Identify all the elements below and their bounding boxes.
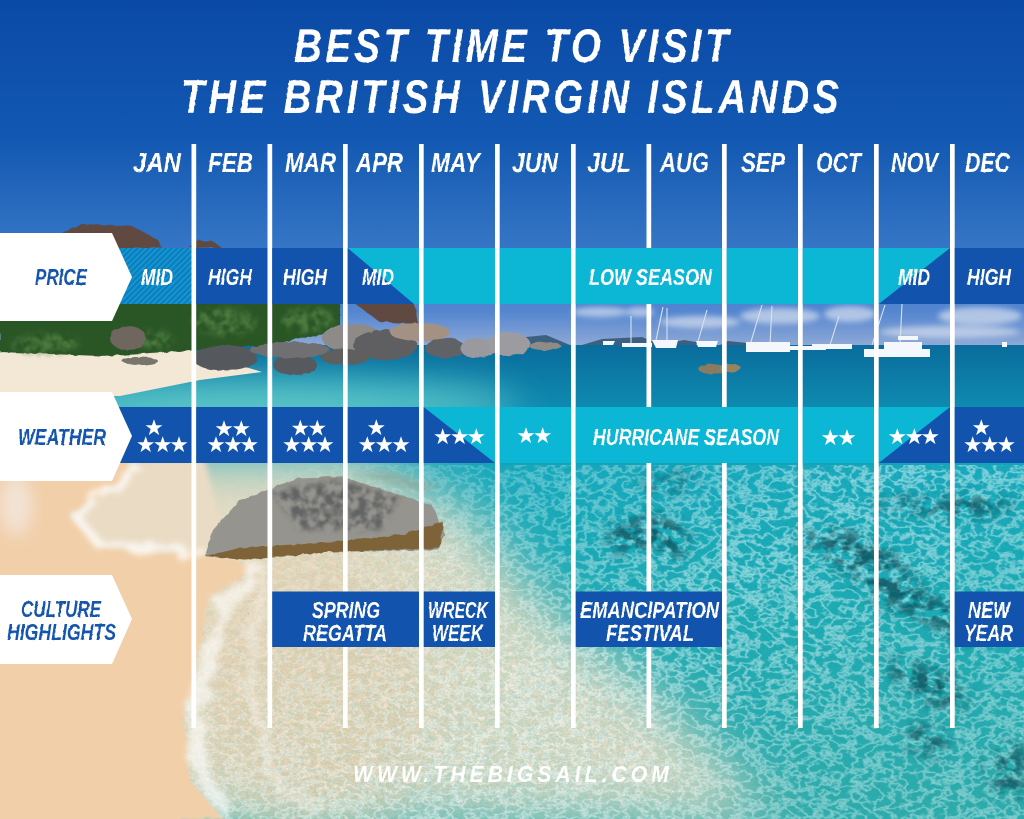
- month headers: NOV: [891, 147, 940, 178]
- emancipation festival: FESTIVAL: [606, 620, 694, 646]
- title: BEST TIME TO VISIT: [294, 20, 732, 73]
- month headers: AUG: [659, 147, 709, 178]
- foam: [76, 468, 320, 815]
- price values: HIGH: [283, 264, 328, 290]
- price values: LOW SEASON: [589, 264, 713, 290]
- light lagoon near beach: [0, 379, 520, 431]
- distant hills: [516, 335, 768, 345]
- sandy shallows: [100, 455, 780, 819]
- price row: [0, 233, 1024, 321]
- website url: WWW.THEBIGSAIL.COM: [353, 761, 669, 787]
- water ripples: [182, 465, 1024, 819]
- weather label: WEATHER: [18, 424, 106, 450]
- month divider lines: [192, 144, 955, 728]
- month headers: JUN: [512, 147, 559, 178]
- wreck week: WEEK: [432, 620, 484, 646]
- spring regatta: [272, 592, 419, 647]
- month headers: OCT: [816, 147, 863, 178]
- price bands: [115, 248, 1024, 304]
- price label: [0, 233, 132, 321]
- sky: [0, 0, 1024, 346]
- price label: PRICE: [35, 264, 88, 290]
- emancipation festival: EMANCIPATION: [580, 597, 720, 623]
- sailing boats: [603, 304, 1007, 357]
- dry sand: [0, 455, 250, 819]
- far rocks above price band: [62, 224, 418, 324]
- price values: MID: [898, 264, 930, 290]
- price values: HIGH: [967, 264, 1012, 290]
- sea: [0, 345, 1024, 819]
- month headers: JUL: [587, 147, 631, 178]
- shoreline boulders: [110, 323, 741, 375]
- greenery: [0, 300, 340, 356]
- hurricane season text: HURRICANE SEASON: [593, 424, 780, 450]
- price values: HIGH: [208, 264, 253, 290]
- month headers: APR: [355, 147, 404, 178]
- month headers: FEB: [208, 147, 253, 178]
- culture highlights row: [0, 575, 1024, 664]
- new year: [955, 592, 1024, 647]
- wreck week: [424, 592, 495, 647]
- culture label: CULTURE: [21, 596, 102, 622]
- reflection by boulder: [350, 472, 440, 492]
- culture label: HIGHLIGHTS: [7, 619, 116, 645]
- weather label: [0, 392, 132, 481]
- title: THE BRITISH VIRGIN ISLANDS: [181, 71, 839, 124]
- price values: MID: [362, 264, 394, 290]
- wreck week: WRECK: [428, 597, 489, 623]
- month headers: MAY: [431, 147, 482, 178]
- month headers: JAN: [133, 147, 182, 178]
- new year: NEW: [968, 597, 1011, 623]
- foreground boulder: [205, 476, 445, 560]
- clouds: [572, 306, 1022, 338]
- wave tongue over sand: [50, 460, 225, 565]
- month headers: DEC: [965, 147, 1011, 178]
- month headers: MAR: [285, 147, 337, 178]
- spring regatta: SPRING: [312, 597, 380, 623]
- price values: [141, 264, 1012, 290]
- star ratings: [137, 419, 1015, 452]
- price values: MID: [141, 264, 173, 290]
- weather row: [0, 392, 1024, 481]
- dry beach: [0, 350, 262, 396]
- title: [181, 20, 839, 124]
- spring regatta: REGATTA: [303, 620, 387, 646]
- weather bands: [115, 407, 1024, 463]
- month headers: [133, 147, 1011, 178]
- emancipation festival: [576, 592, 722, 647]
- sand underlay at frame edges: [0, 460, 180, 819]
- culture label: [0, 575, 132, 664]
- reef patches: [610, 474, 1024, 800]
- month headers: SEP: [741, 147, 785, 178]
